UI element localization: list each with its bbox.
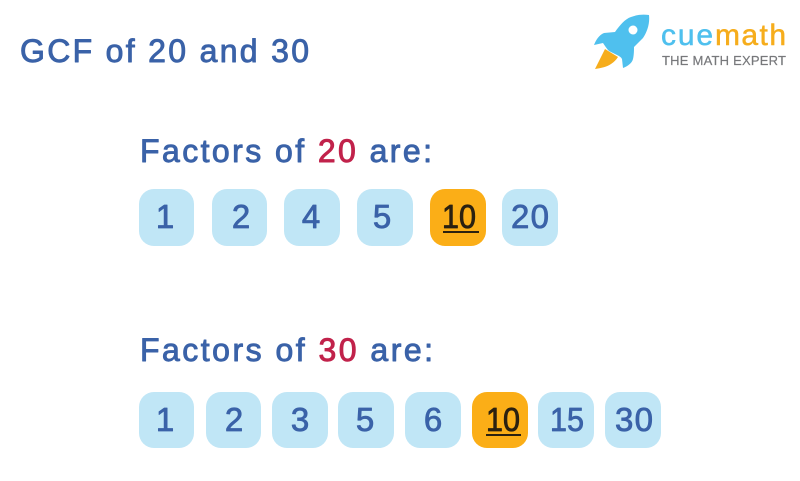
- factor 20: [502, 189, 558, 246]
- factor 10 highlighted: [472, 392, 528, 448]
- factor 1: [139, 392, 194, 448]
- factor 2: 2: [225, 401, 243, 438]
- factor 30: 30: [615, 401, 653, 438]
- title: GCF of 20 and 30: [20, 33, 309, 69]
- factor 2: [212, 189, 267, 246]
- factor 3: [272, 392, 328, 448]
- factor 4: [284, 189, 340, 246]
- icon: rocket: [594, 15, 649, 69]
- factor 6: [405, 392, 461, 448]
- factor row: 20: [139, 189, 558, 246]
- heading: factors of 20: Factors of 20 are:: [140, 133, 432, 169]
- factor row: 30: [139, 392, 661, 448]
- factor 5: 5: [373, 198, 391, 235]
- factor 5: 5: [356, 401, 374, 438]
- factor 1: 1: [156, 198, 174, 235]
- factor 10 highlighted: 10: [442, 198, 476, 235]
- factor 3: 3: [291, 401, 309, 438]
- factor 5: [357, 189, 413, 246]
- logo wordmark: cue: [661, 19, 713, 52]
- factor 30: [605, 392, 661, 448]
- factor 20: 20: [511, 198, 549, 235]
- factor 15: 15: [550, 401, 584, 438]
- factor 10 highlighted: 10: [486, 401, 520, 438]
- factor 15: [538, 392, 594, 448]
- logo: cuemath: [594, 15, 786, 69]
- logo tagline: THE MATH EXPERT: [662, 53, 786, 68]
- factor 6: 6: [424, 401, 442, 438]
- factor 5: [338, 392, 394, 448]
- logo: cuemath: math: [715, 19, 786, 52]
- factor 2: 2: [232, 198, 250, 235]
- factor 4: 4: [302, 198, 320, 235]
- heading: factors of 30: Factors of 30 are:: [140, 332, 433, 368]
- factor 10 highlighted: [430, 189, 486, 246]
- factor 1: [139, 189, 194, 246]
- factor 2: [206, 392, 261, 448]
- factor 1: 1: [156, 401, 174, 438]
